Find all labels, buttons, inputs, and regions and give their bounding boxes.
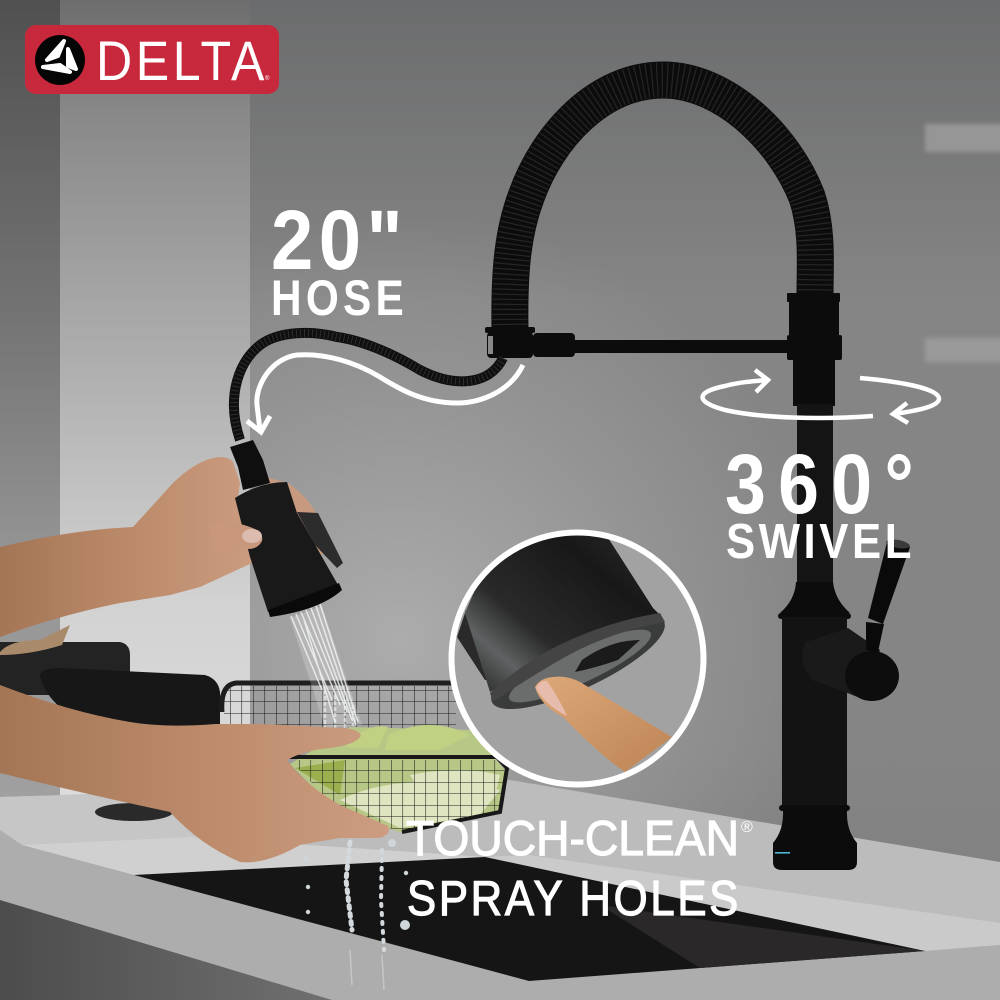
Delta logo: ® bbox=[265, 75, 270, 82]
Delta logo: DELTA bbox=[96, 29, 268, 92]
countertop and sink bbox=[0, 780, 1000, 1000]
faucet: ribbed spring arch bbox=[510, 80, 815, 330]
pull-down hose bbox=[234, 333, 503, 440]
inset: touch-clean spray holes bbox=[452, 525, 704, 784]
label: 20 inch hose bbox=[271, 193, 408, 326]
label: 360 degree swivel bbox=[725, 437, 926, 569]
label: touch-clean spray holes bbox=[406, 812, 753, 926]
label: 20 inch hose: HOSE bbox=[271, 270, 408, 326]
faucet: lever handle bbox=[802, 538, 911, 701]
label: 360 degree swivel: 360° bbox=[725, 437, 926, 531]
label: 20 inch hose: 20" bbox=[271, 193, 408, 287]
fingers behind sprayer bbox=[265, 477, 332, 560]
swivel arrows bbox=[702, 370, 939, 423]
faucet: column, arm and base bbox=[485, 293, 857, 870]
water drops falling into the sink bbox=[303, 839, 410, 990]
upper arm and hand bbox=[0, 457, 262, 637]
pull-down sprayer head bbox=[230, 440, 343, 617]
Delta logo bbox=[25, 25, 279, 94]
thumb over sprayer bbox=[208, 523, 262, 552]
hose arrow bbox=[247, 355, 523, 432]
water spray bbox=[290, 604, 362, 730]
label: touch-clean spray holes: TOUCH-CLEAN bbox=[406, 812, 739, 866]
basket of apple slices bbox=[222, 683, 507, 832]
label: touch-clean spray holes: ® bbox=[741, 819, 753, 836]
bowls behind bbox=[0, 625, 220, 821]
fingernail bbox=[242, 529, 262, 543]
label: 360 degree swivel: SWIVEL bbox=[726, 515, 915, 569]
label: touch-clean spray holes: SPRAY HOLES bbox=[407, 872, 741, 926]
lower arm and hand bbox=[0, 685, 389, 862]
